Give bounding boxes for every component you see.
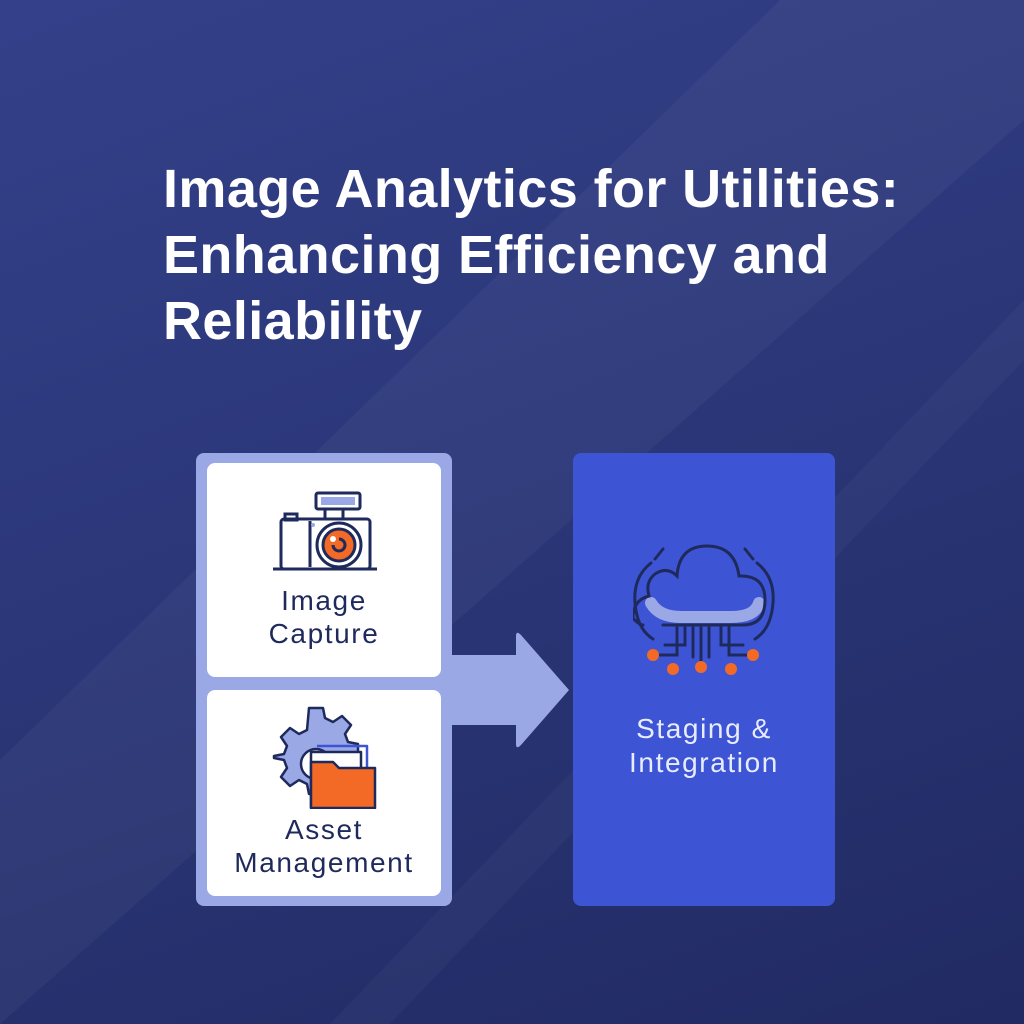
panel: staging & integration bbox=[573, 453, 835, 906]
title: Reliability bbox=[163, 291, 422, 351]
icon: camera bbox=[273, 492, 377, 570]
label: asset management: Asset bbox=[285, 814, 363, 845]
card: image capture bbox=[207, 463, 441, 677]
arrow bbox=[452, 632, 569, 748]
label: asset management bbox=[234, 814, 414, 878]
label: staging & integration: Integration bbox=[629, 747, 779, 778]
card: asset management bbox=[207, 690, 441, 896]
label: staging & integration bbox=[629, 713, 779, 778]
label: asset management: Management bbox=[234, 847, 414, 878]
label: image capture: Image bbox=[281, 585, 367, 616]
icon: cloud network bbox=[633, 544, 775, 675]
panel: left inputs bbox=[196, 453, 452, 906]
icon: gear and folder bbox=[272, 706, 376, 809]
title: Enhancing Efficiency and bbox=[163, 225, 830, 285]
title bbox=[163, 159, 899, 351]
label: image capture: Capture bbox=[269, 618, 379, 649]
label: image capture bbox=[269, 585, 379, 649]
label: staging & integration: Staging & bbox=[636, 713, 772, 744]
title: Image Analytics for Utilities: bbox=[163, 159, 899, 219]
